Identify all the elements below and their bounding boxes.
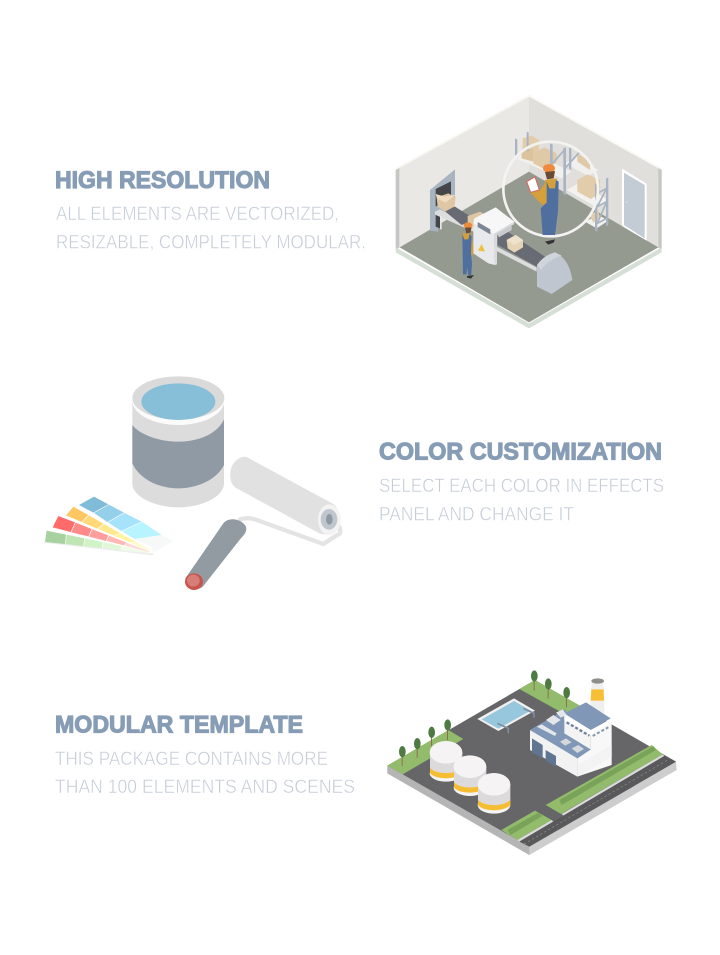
factory gate: [430, 169, 455, 232]
swatch blade: yellow: [66, 507, 150, 551]
cardboard boxes: [436, 193, 485, 229]
worker with clipboard: [527, 164, 559, 245]
text: modular template description: THIS PACKAGE CONTAINS MORE: [55, 749, 328, 770]
ground slab: [387, 680, 677, 855]
worker foreground: [462, 222, 474, 279]
magnifier circle: [503, 142, 598, 236]
storage tanks: [430, 741, 510, 814]
smokestack: [590, 678, 605, 713]
paint can: [132, 376, 224, 507]
warehouse shelves: [515, 132, 608, 232]
illustration: paint can, roller and swatches: [43, 376, 341, 590]
factory building: [530, 702, 612, 777]
green lawns and hedges: [387, 680, 676, 847]
room walls and floor: [396, 95, 662, 328]
illustration: isometric industrial plant: [387, 670, 677, 855]
section: modular template text: [55, 712, 355, 798]
heading: color customization: COLOR CUSTOMIZATION: [379, 438, 662, 466]
illustration: isometric warehouse room: [396, 95, 662, 328]
inspection machine: [473, 207, 514, 265]
trees: [399, 670, 570, 766]
conveyor end cap: [537, 252, 572, 294]
text: color customization description: [379, 476, 664, 526]
text: high resolution description: ALL ELEMENTS ARE VECTORIZED,: [56, 204, 339, 225]
section: high resolution text: [55, 167, 366, 254]
door: [622, 169, 647, 241]
box on conveyor: [507, 235, 523, 253]
heading: modular template: MODULAR TEMPLATE: [55, 712, 303, 739]
water pool: [477, 698, 535, 733]
text: color customization description: SELECT EACH COLOR IN EFFECTS: [379, 476, 664, 497]
color swatch fan: [43, 497, 173, 555]
swatch blade: green: [43, 531, 153, 555]
swatch blade: red: [53, 516, 150, 552]
text: high resolution description: [56, 204, 366, 254]
swatch blade: blue: [79, 497, 173, 553]
text: modular template description: [55, 749, 355, 798]
text: modular template description: THAN 100 ELEMENTS AND SCENES: [55, 777, 355, 798]
section: color customization text: [379, 438, 664, 526]
paint roller: [185, 457, 341, 590]
text: high resolution description: RESIZABLE, COMPLETELY MODULAR.: [56, 232, 366, 254]
heading: high resolution: HIGH RESOLUTION: [55, 167, 270, 194]
conveyor belt: [435, 207, 545, 272]
text: color customization description: PANEL AND CHANGE IT: [379, 504, 574, 526]
